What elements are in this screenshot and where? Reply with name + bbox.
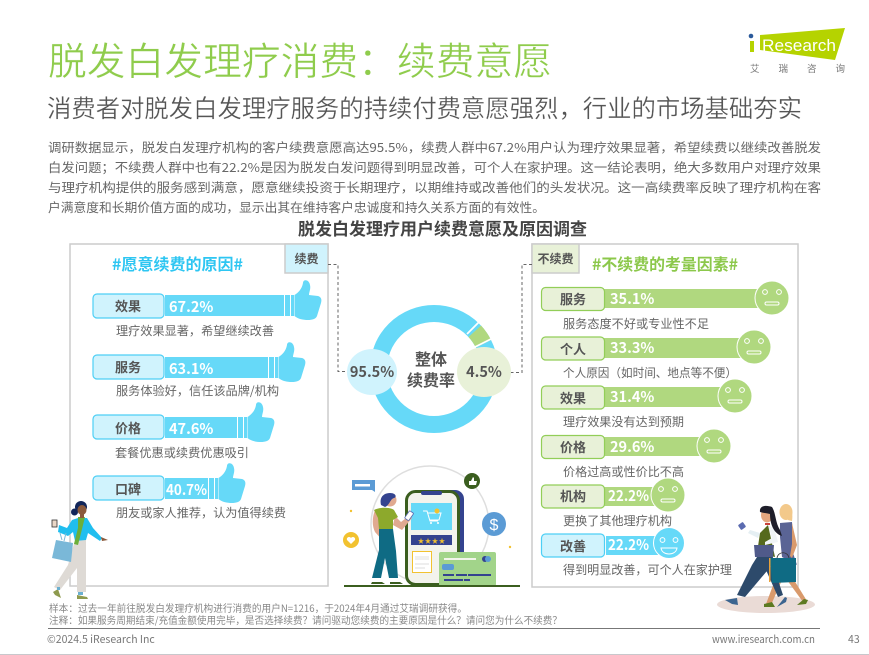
logo: iResearch — [749, 28, 845, 75]
row: price 29.6% — [542, 429, 731, 480]
page number: 43 — [848, 632, 860, 647]
row: institution 22.2%: 22.2% — [608, 485, 649, 506]
heading: factors for not renewing: #不续费的考量因素# — [592, 251, 738, 275]
row: word of mouth 40.7% — [93, 463, 286, 521]
illustration: woman with phone and credit card: ★ — [425, 538, 432, 545]
illustration: woman with phone and credit card — [343, 466, 520, 587]
website: www.iresearch.com.cn — [712, 632, 815, 647]
row: effect 67.2%: 效果 — [115, 296, 141, 315]
row: effect 31.4% — [542, 379, 752, 430]
panel: reasons for not renewing — [532, 244, 798, 587]
row: service 63.1%: 服务 — [115, 357, 141, 376]
donut center label: 续费率 — [407, 367, 455, 391]
body paragraph: 调研数据显示，脱发白发理疗机构的客户续费意愿高达95.5%，续费人群中67.2%用户认为理疗效果显著，希望续费以继续改善脱发 — [48, 138, 821, 156]
donut center label — [407, 346, 455, 391]
row: effect 31.4%: 理疗效果没有达到预期 — [563, 413, 684, 430]
row: effect 67.2% — [93, 280, 321, 339]
row: word of mouth 40.7%: 朋友或家人推荐，认为值得续费 — [116, 504, 286, 521]
row: effect 67.2%: 理疗效果显著，希望继续改善 — [116, 322, 274, 339]
illustration: two women shopping — [717, 504, 815, 613]
row: word of mouth 40.7%: 40.7% — [166, 479, 207, 500]
body paragraph — [48, 138, 821, 216]
row: effect 67.2%: 67.2% — [169, 296, 213, 317]
body paragraph: 白发问题；不续费人群中也有22.2%是因为脱发白发问题得到明显改善，可个人在家护理。这一结论表明，绝大多数用户对理疗效果 — [48, 158, 821, 176]
copyright: ©2024.5 iResearch Inc — [47, 632, 155, 647]
logo: iResearch: Research — [762, 37, 836, 55]
callout: 4.5%: 4.5% — [466, 361, 502, 382]
panel: reasons for renewing — [70, 244, 328, 586]
row: personal 33.3%: 33.3% — [610, 337, 654, 358]
chart title: 脱发白发理疗用户续费意愿及原因调查 — [298, 215, 587, 240]
row: improved 22.2% — [542, 528, 732, 578]
row: effect 31.4%: 效果 — [560, 388, 586, 407]
illustration: woman with phone and credit card: ★ — [418, 538, 425, 545]
row: service 35.1% — [542, 281, 789, 332]
illustration: woman with phone and credit card: ★ — [432, 538, 439, 545]
callout: 95.5% — [347, 349, 397, 395]
connector: renew tab to donut — [328, 264, 349, 372]
row: personal 33.3%: 个人原因（如时间、地点等不便） — [563, 364, 737, 381]
row: improved 22.2%: 得到明显改善，可个人在家护理 — [563, 561, 732, 578]
row: institution 22.2% — [542, 478, 685, 529]
illustration: woman with phone and credit card: ★ — [439, 538, 446, 545]
row: service 35.1%: 35.1% — [610, 288, 654, 309]
row: price 29.6%: 29.6% — [610, 436, 654, 457]
row: personal 33.3% — [542, 330, 771, 381]
row: price 47.6% — [93, 402, 274, 461]
heading: reasons for renewing: #愿意续费的原因# — [112, 251, 243, 275]
row: institution 22.2%: 机构 — [560, 486, 586, 505]
row: effect 31.4%: 31.4% — [610, 386, 654, 407]
tab: renew: 续费 — [294, 250, 319, 267]
donut center label: 整体 — [415, 346, 447, 370]
row: price 47.6%: 套餐优惠或续费优惠吸引 — [115, 444, 249, 461]
callout: 95.5%: 95.5% — [350, 361, 394, 382]
footnote: 注释：如果服务周期结束/充值金额使用完毕，是否选择续费？请问驱动您续费的主要原因是什么？请问您为什么不续费？ — [49, 612, 562, 627]
row: institution 22.2%: 更换了其他理疗机构 — [563, 512, 672, 529]
row: personal 33.3%: 个人 — [560, 339, 586, 358]
row: price 29.6%: 价格 — [560, 437, 586, 456]
row: improved 22.2%: 改善 — [560, 536, 586, 555]
row: service 35.1%: 服务 — [560, 289, 586, 308]
row: service 35.1%: 服务态度不好或专业性不足 — [563, 315, 709, 332]
sample note: 样本：过去一年前往脱发白发理疗机构进行消费的用户N=1216，于2024年4月通过艾瑞调研获得。 — [49, 600, 467, 615]
tab: not renew: 不续费 — [537, 250, 574, 267]
title: 脱发白发理疗消费：续费意愿 — [48, 31, 552, 87]
callout: 4.5% — [457, 347, 511, 397]
connector: not renew tab to donut — [509, 264, 532, 372]
row: improved 22.2%: 22.2% — [608, 534, 649, 555]
row: price 29.6%: 价格过高或性价比不高 — [563, 463, 684, 480]
subtitle: 消费者对脱发白发理疗服务的持续付费意愿强烈，行业的市场基础夯实 — [47, 89, 802, 124]
row: word of mouth 40.7%: 口碑 — [115, 479, 141, 498]
row: price 47.6%: 47.6% — [169, 418, 213, 439]
donut chart: overall renewal rate — [347, 314, 511, 424]
logo: iResearch: 艾 瑞 咨 询 — [750, 61, 845, 75]
illustration: woman with phone and credit card: $ — [490, 517, 499, 534]
tab: not renew — [532, 244, 579, 273]
row: service 63.1% — [93, 342, 305, 399]
row: service 63.1%: 服务体验好，信任该品牌/机构 — [116, 382, 279, 399]
row: service 63.1%: 63.1% — [169, 358, 213, 379]
row: price 47.6%: 价格 — [115, 418, 141, 437]
illustration: woman with shopping bag — [52, 501, 108, 599]
tab: renew — [285, 244, 328, 273]
body paragraph: 与理疗机构提供的服务感到满意，愿意继续投资于长期理疗，以期维持或改善他们的头发状况。这一高续费率反映了理疗机构在客 — [48, 178, 821, 196]
body paragraph: 户满意度和长期价值方面的成功，显示出其在维持客户忠诚度和持久关系方面的有效性。 — [48, 198, 545, 216]
